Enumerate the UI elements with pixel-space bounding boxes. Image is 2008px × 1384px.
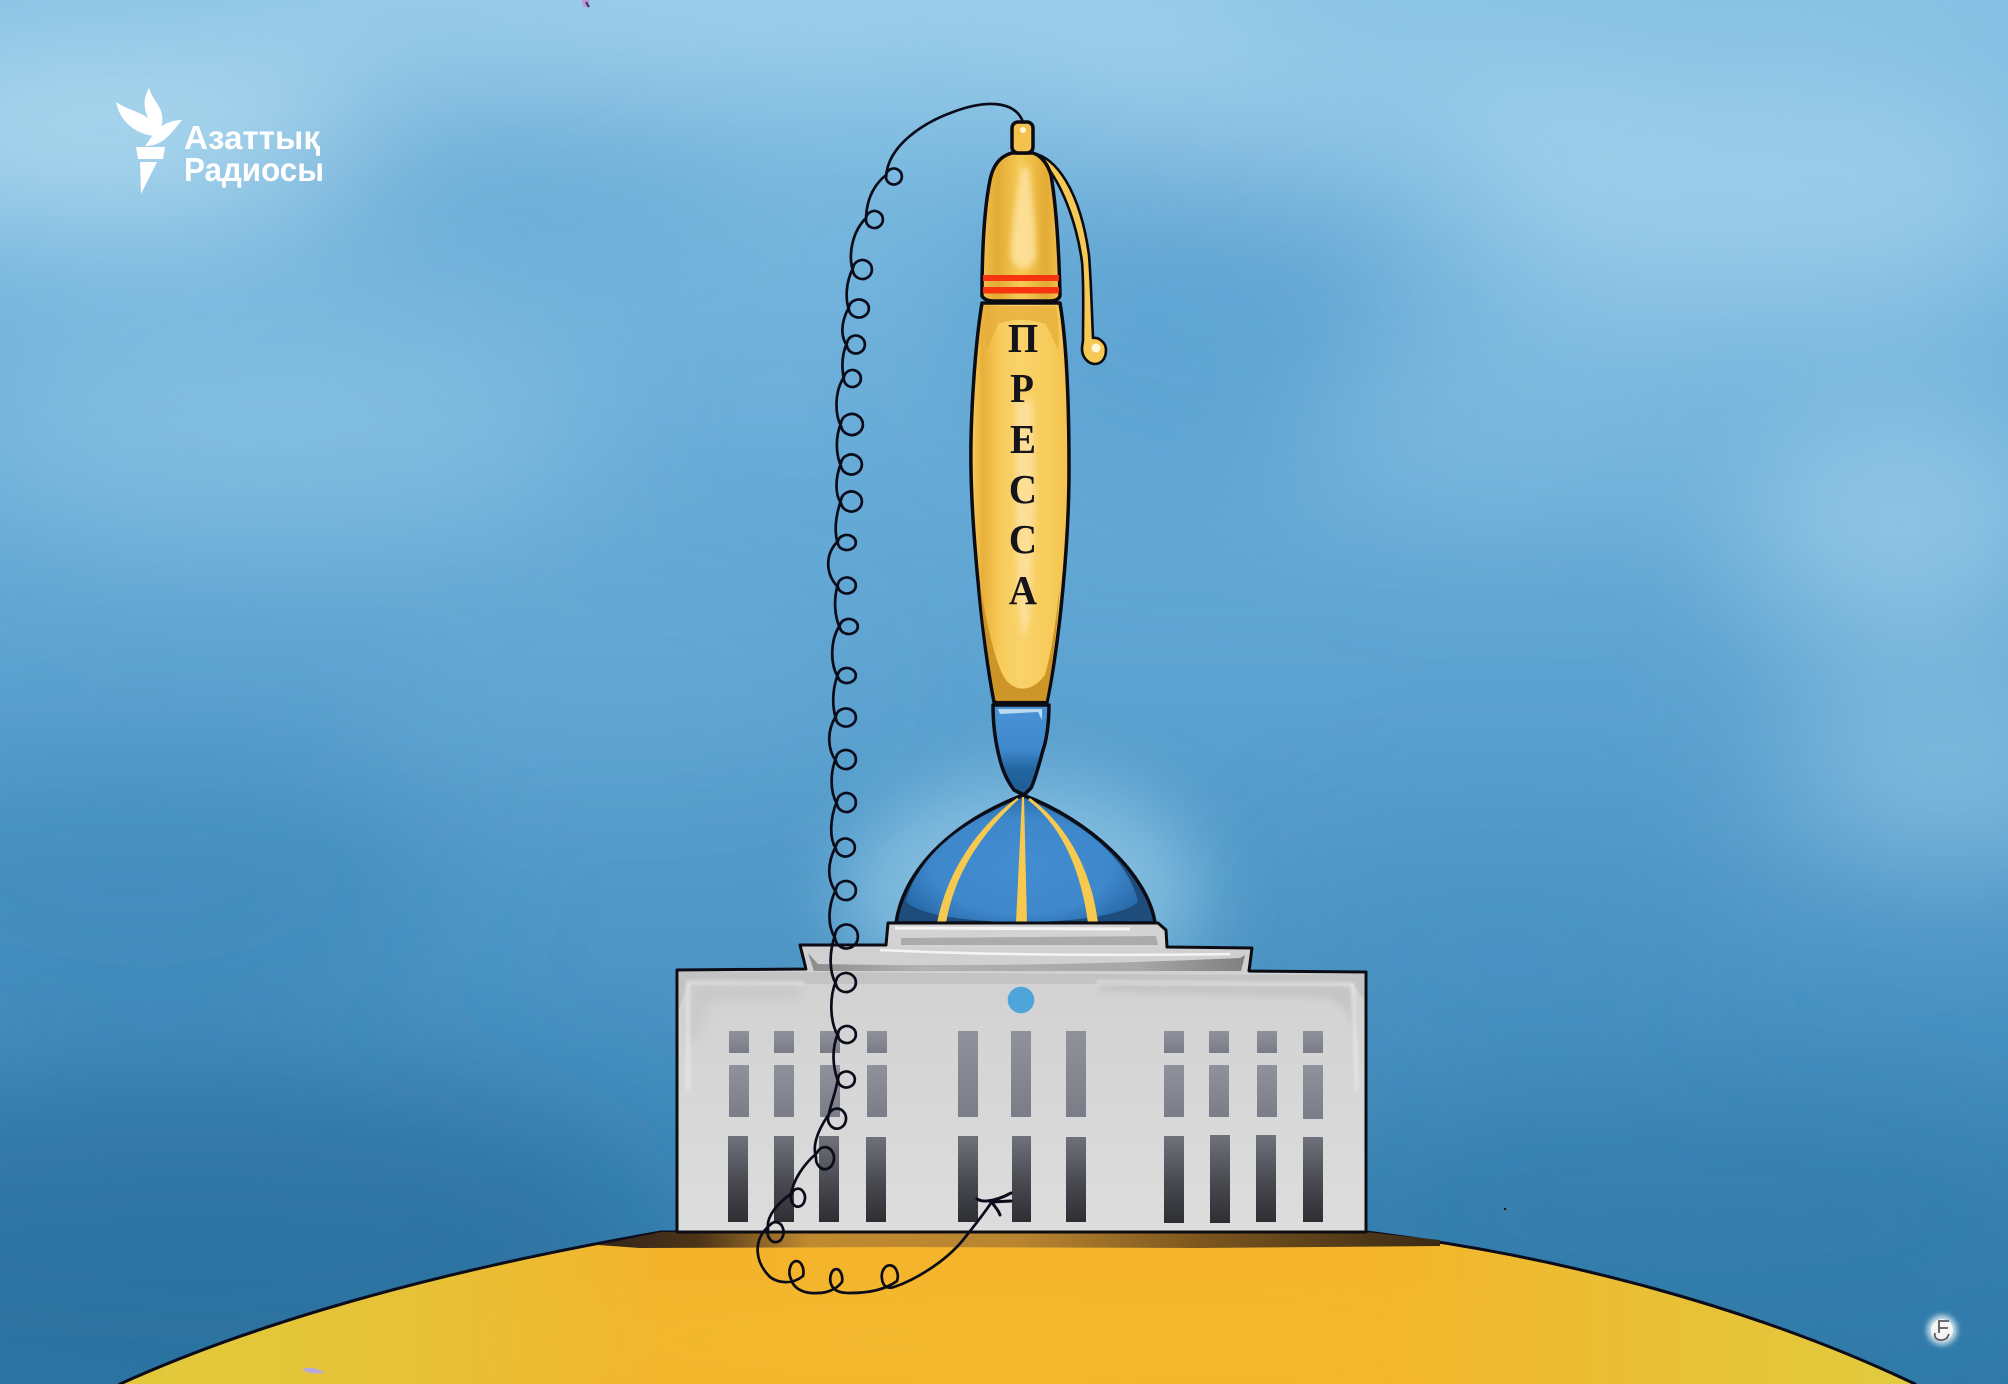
- pen label text: П: [1008, 315, 1038, 361]
- building silhouette: [677, 923, 1366, 1232]
- pen label text: С: [1009, 516, 1037, 562]
- pen label text: Е: [1010, 416, 1036, 462]
- pen clip: [1032, 153, 1106, 364]
- windows: upper row: [729, 1031, 1323, 1119]
- pen label text: А: [1009, 567, 1037, 613]
- pen label text: С: [1009, 466, 1037, 512]
- main block: [679, 972, 1364, 1223]
- cord plug arrow: [977, 1193, 1011, 1215]
- logo: Azattyq Radiosy: [116, 88, 324, 194]
- pen: ПРЕССА: [971, 122, 1106, 795]
- building: [677, 795, 1366, 1232]
- pen label text: Р: [1010, 365, 1034, 411]
- pen barrel: [971, 303, 1069, 702]
- dome: [896, 795, 1155, 923]
- logo wordmark: [184, 119, 324, 188]
- upper tier: [803, 947, 1250, 972]
- ground: yellow hill: [120, 1232, 1915, 1384]
- pen nib: [993, 705, 1049, 795]
- building shadow band: [598, 1232, 1440, 1248]
- windows: lower row: [728, 1135, 1323, 1223]
- phone-style curly cord: [758, 104, 1023, 1293]
- pen label text: [1008, 315, 1038, 613]
- logo wordmark: Радиосы: [184, 151, 324, 188]
- artist signature mark: [1927, 1315, 1957, 1345]
- plinth: [888, 925, 1165, 947]
- logo wordmark: Азаттық: [184, 119, 320, 156]
- dome gold ribs: [937, 797, 1098, 923]
- icon: torch: [116, 88, 182, 194]
- pen cap: [982, 122, 1060, 301]
- blue circle emblem: [1008, 987, 1034, 1013]
